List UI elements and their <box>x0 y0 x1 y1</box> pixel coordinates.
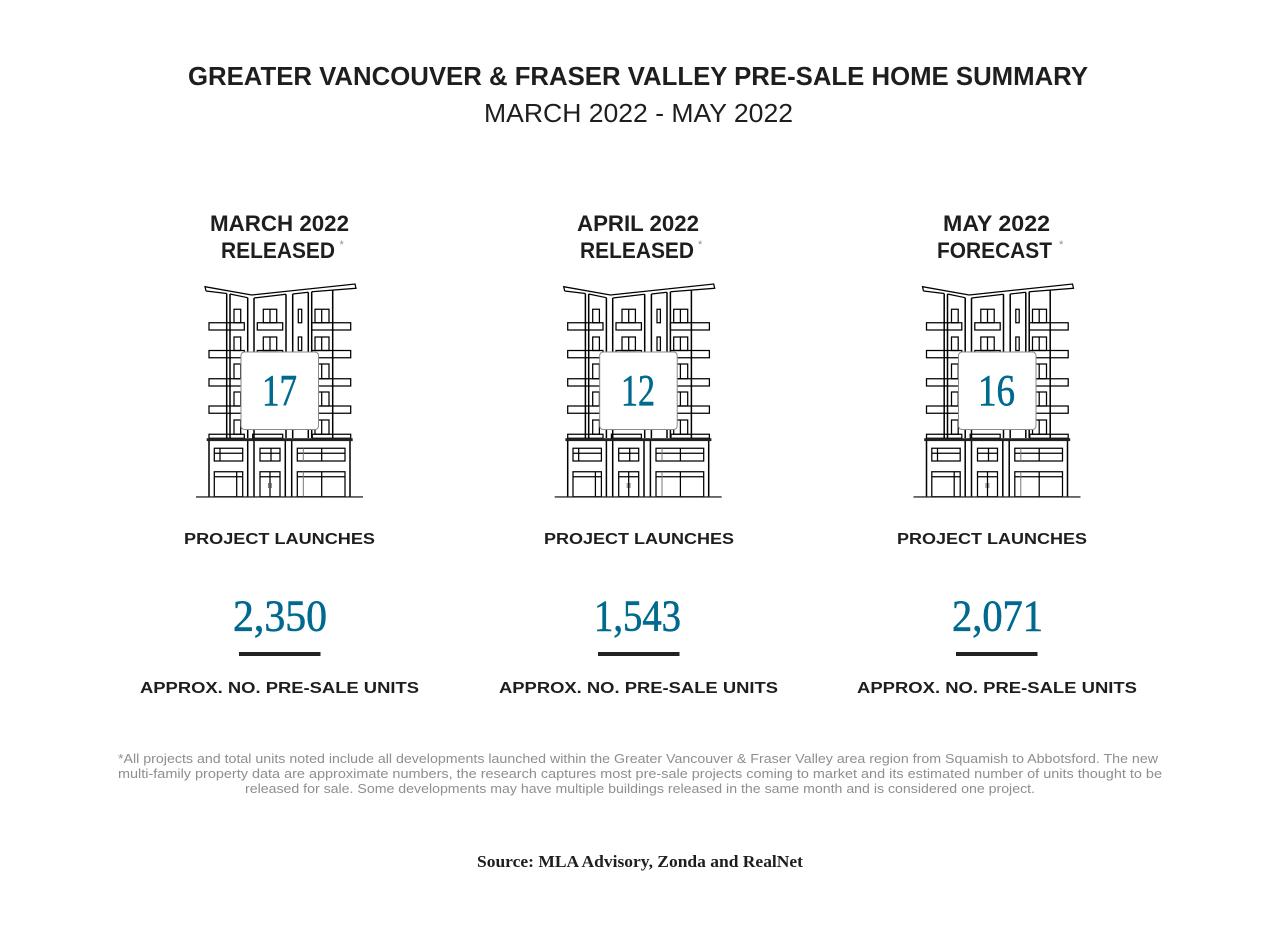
icon: building with project count <box>196 284 363 498</box>
heading: March 2022 released: * <box>340 239 344 251</box>
heading: May 2022 forecast: FORECAST <box>937 238 1053 263</box>
label: project launches: PROJECT LAUNCHES <box>184 531 375 548</box>
title: GREATER VANCOUVER & FRASER VALLEY PRE-SALE HOME SUMMARY <box>188 61 1088 91</box>
subtitle: date range: MARCH 2022 - MAY 2022 <box>484 98 793 128</box>
panel: May 2022 <box>857 211 1137 697</box>
rule <box>598 652 680 656</box>
label: approx pre-sale units: APPROX. NO. PRE-SALE UNITS <box>499 680 778 697</box>
title <box>188 61 1088 128</box>
rule <box>956 652 1038 656</box>
label: project launches: PROJECT LAUNCHES <box>897 531 1087 548</box>
label: approx pre-sale units: APPROX. NO. PRE-SALE UNITS <box>857 680 1137 697</box>
footnote: multi-family property data are approximate numbers, the research captures most pre-sale projects coming to market and its estimated number of units thought to be <box>118 766 1162 781</box>
number: pre-sale units: 2,350 <box>233 592 327 640</box>
heading: April 2022 released: RELEASED <box>580 238 694 263</box>
heading: March 2022 released: MARCH 2022 <box>210 211 349 236</box>
heading: May 2022 forecast <box>937 211 1064 263</box>
footnote: *All projects and total units noted include all developments launched within the Greater Vancouver & Fraser Valley area region from Squamish to Abbotsford. The new <box>118 751 1159 766</box>
icon: building with project count: 12 <box>621 366 655 415</box>
number: pre-sale units: 2,071 <box>952 592 1043 640</box>
footnote: released for sale. Some developments may have multiple buildings released in the same month and is considered one project. <box>245 781 1035 796</box>
icon: building with project count <box>914 284 1080 498</box>
footnote <box>118 751 1162 796</box>
source line: Source: MLA Advisory, Zonda and RealNet <box>477 852 803 871</box>
icon: building with project count: 17 <box>262 366 297 415</box>
label: project launches: PROJECT LAUNCHES <box>544 531 734 548</box>
heading: May 2022 forecast: MAY 2022 <box>943 211 1050 236</box>
rule <box>239 652 320 656</box>
heading: April 2022 released <box>577 211 703 263</box>
panel: April 2022 <box>499 211 778 697</box>
heading: May 2022 forecast: * <box>1059 239 1064 251</box>
heading: April 2022 released: APRIL 2022 <box>577 211 699 236</box>
label: approx pre-sale units: APPROX. NO. PRE-SALE UNITS <box>140 680 419 697</box>
heading: April 2022 released: * <box>698 239 703 251</box>
panel: March 2022 <box>140 211 419 697</box>
number: pre-sale units: 1,543 <box>594 592 681 640</box>
heading: March 2022 released: RELEASED <box>221 238 335 263</box>
icon: building with project count <box>555 284 722 498</box>
icon: building with project count: 16 <box>978 366 1015 415</box>
heading: March 2022 released <box>210 211 349 263</box>
